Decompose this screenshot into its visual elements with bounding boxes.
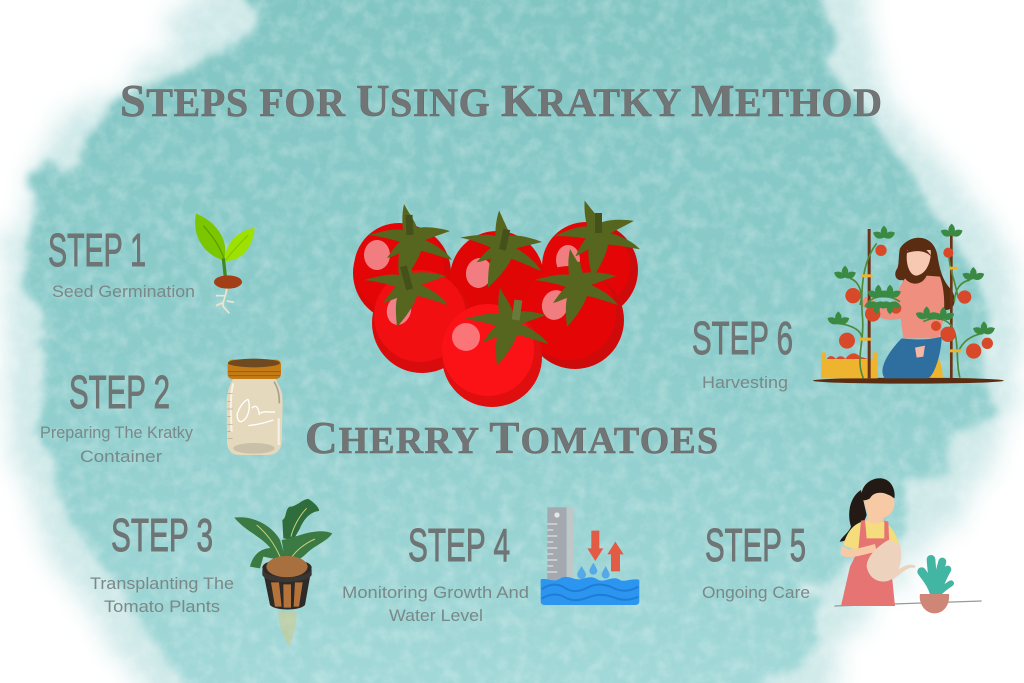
step 2: Container — [80, 447, 162, 466]
jeans — [882, 337, 942, 378]
step 2 — [40, 366, 193, 466]
icon: mason jar — [227, 359, 283, 455]
ground — [813, 378, 1004, 384]
step 1: STEP 1 — [48, 224, 146, 276]
step 5 — [702, 519, 810, 602]
vines — [833, 243, 983, 378]
icon: sprouting seed — [195, 214, 255, 313]
step 3: Tomato Plants — [104, 597, 220, 616]
crate — [821, 352, 878, 378]
step 3 — [90, 509, 234, 616]
step 1: Seed Germination — [52, 282, 195, 301]
illustration: cherry tomatoes — [353, 194, 643, 407]
step 5: STEP 5 — [705, 519, 806, 571]
step 1 — [48, 224, 195, 301]
face — [907, 250, 931, 276]
hair — [895, 238, 955, 310]
stakes — [868, 229, 871, 378]
title: STEPS FOR USING KRATKY METHOD — [120, 75, 882, 126]
step 6 — [692, 312, 793, 392]
tomatoes — [839, 245, 993, 359]
step 3: STEP 3 — [111, 509, 213, 561]
step 5: Ongoing Care — [702, 583, 810, 602]
step 3: Transplanting The — [90, 574, 234, 593]
step 4: Monitoring Growth And — [342, 583, 529, 602]
boot — [929, 357, 943, 378]
step 6: STEP 6 — [692, 312, 793, 364]
step 2: STEP 2 — [69, 366, 170, 418]
sweater — [860, 276, 944, 338]
step 4: Water Level — [389, 606, 483, 625]
icon: woman watering a plant — [834, 478, 982, 613]
icon: woman harvesting tomatoes — [813, 224, 1004, 384]
icon: water level gauge — [541, 507, 639, 605]
heading: Cherry Tomatoes: CHERRY TOMATOES — [305, 413, 718, 463]
step 2: Preparing The Kratky — [40, 423, 193, 442]
step 4: STEP 4 — [408, 519, 510, 571]
icon: plant in net pot — [234, 499, 332, 647]
step 4 — [342, 519, 529, 625]
leaves — [826, 224, 996, 336]
hand — [915, 346, 925, 358]
step 6: Harvesting — [702, 373, 788, 392]
